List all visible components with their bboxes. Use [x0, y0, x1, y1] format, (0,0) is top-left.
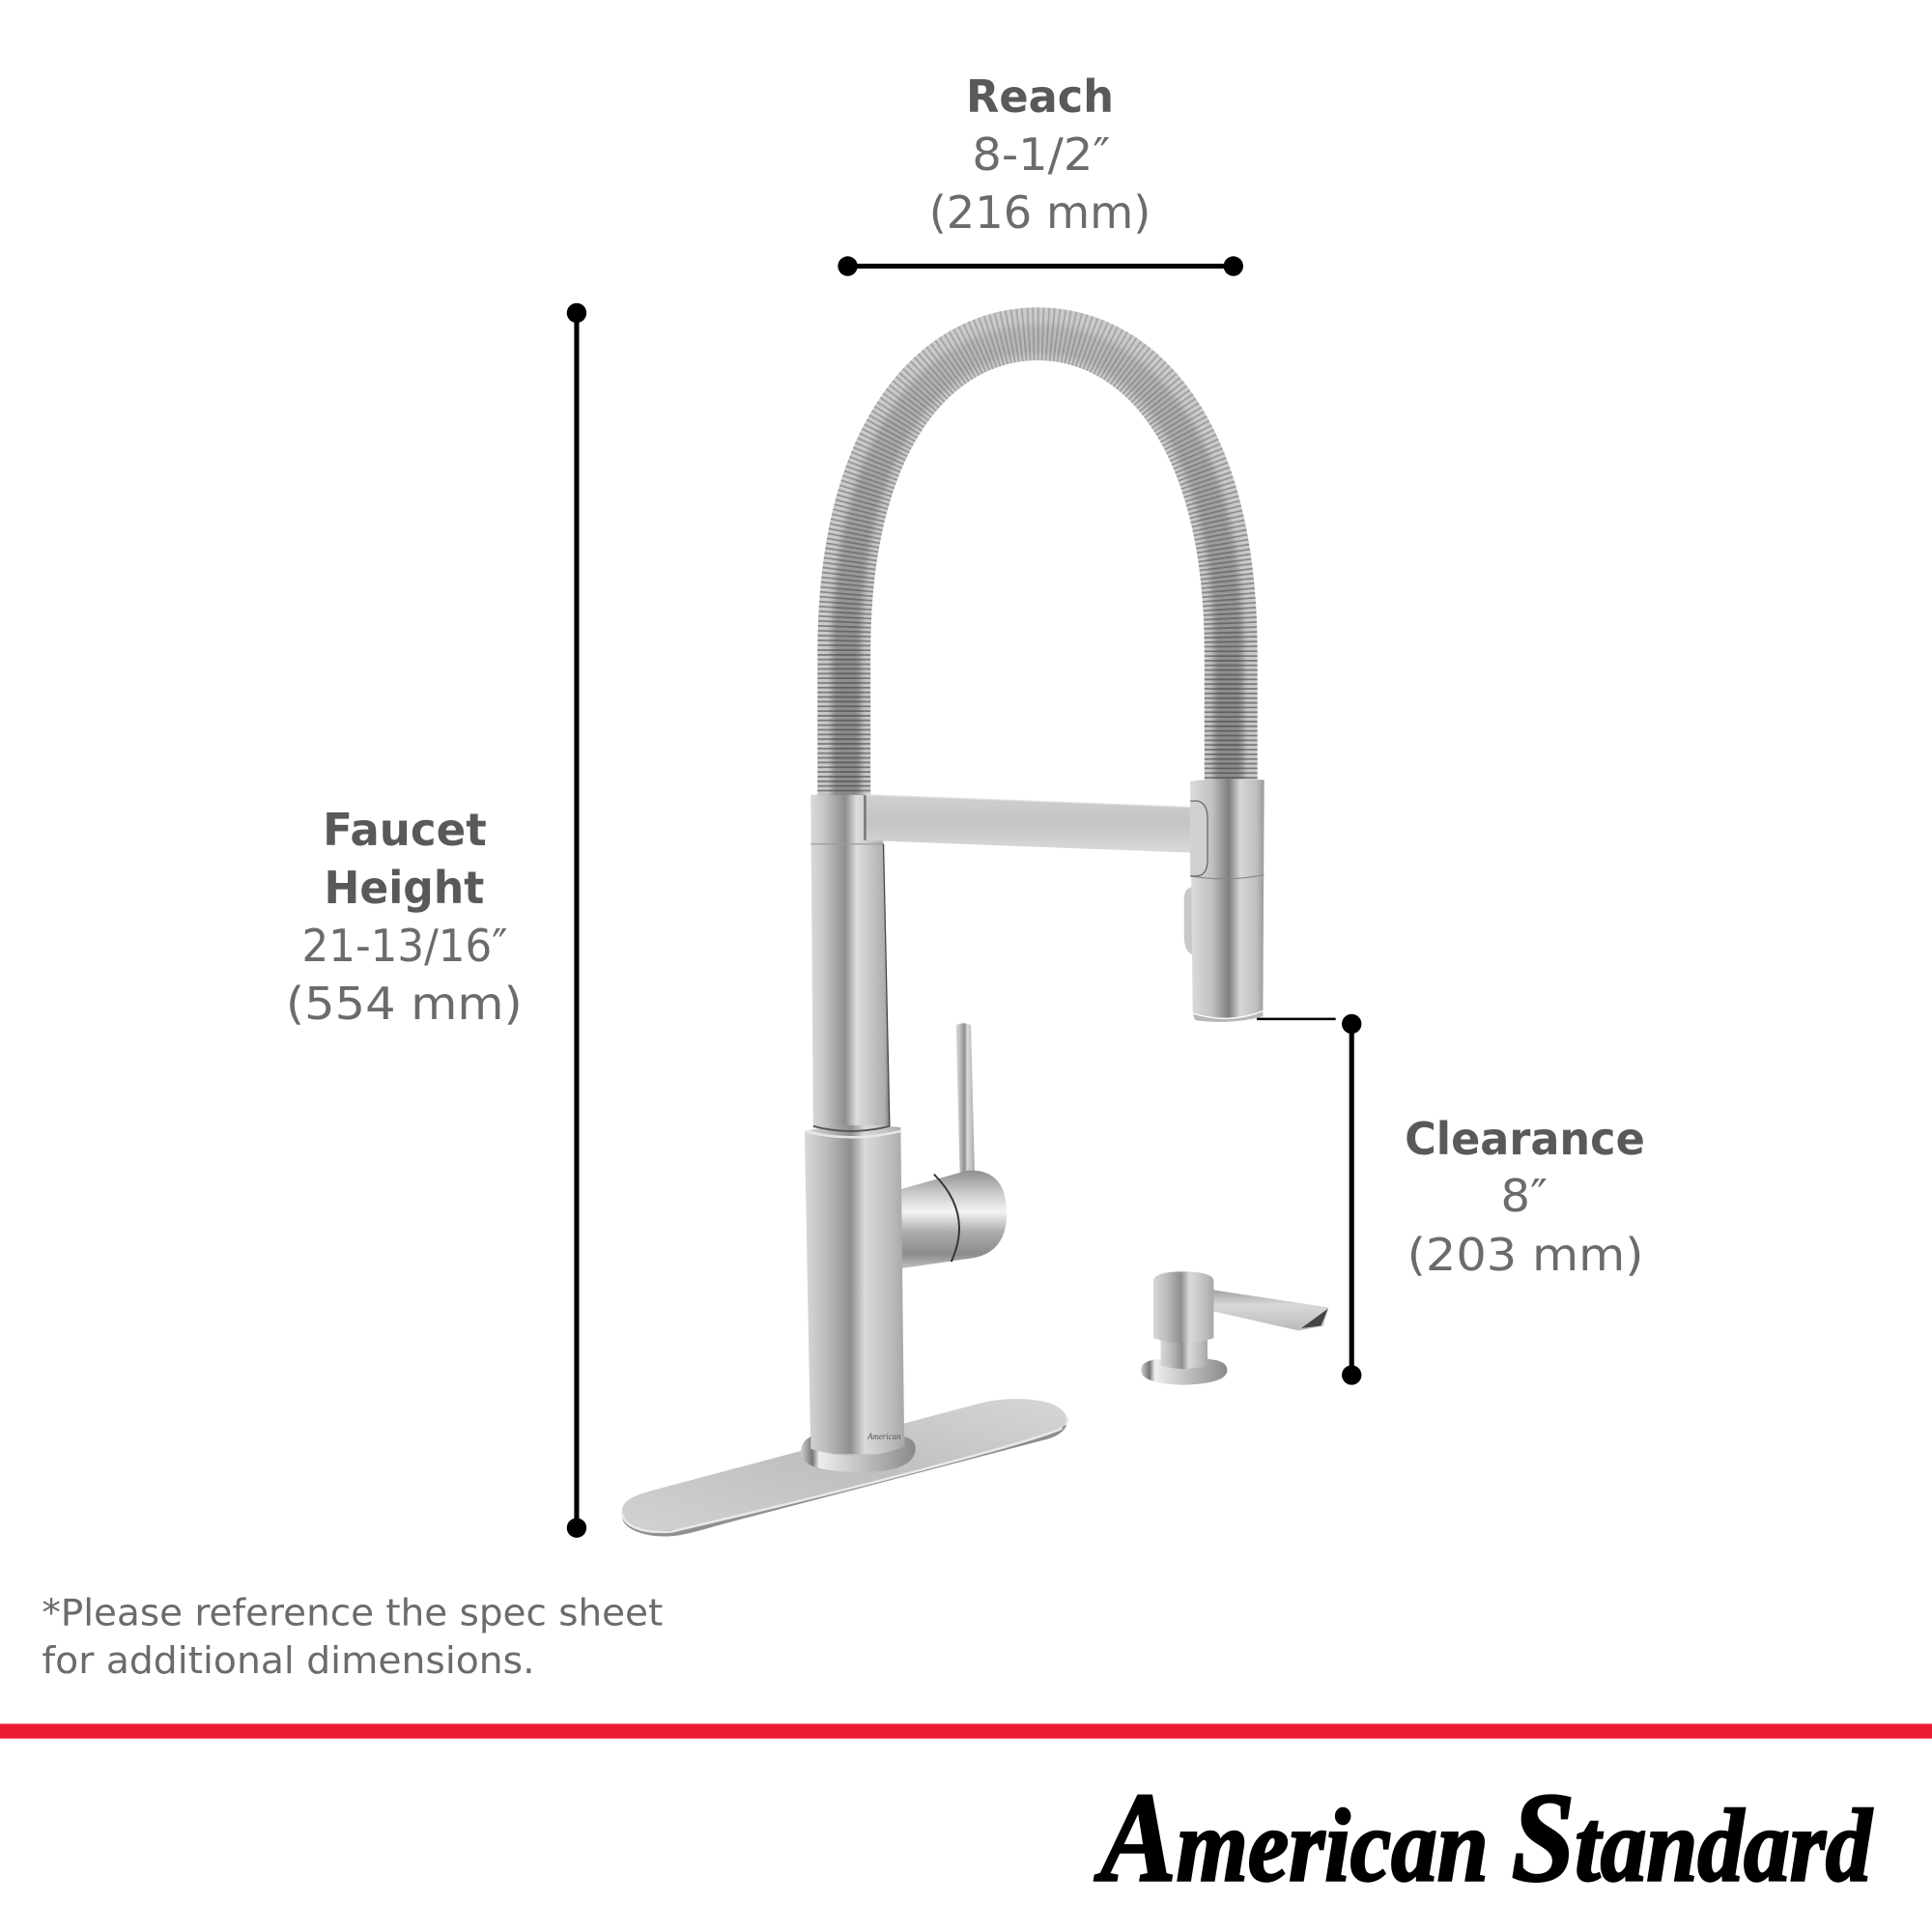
lower body [805, 1125, 904, 1454]
red divider band [0, 1723, 1932, 1739]
faucet height label: Faucet [323, 804, 487, 856]
deck plate [622, 1399, 1068, 1537]
base ring: American [867, 1432, 901, 1441]
clearance label [1405, 1113, 1645, 1281]
reach label: (216 mm) [929, 186, 1151, 239]
faucet height label: Height [324, 862, 484, 914]
faucet height label [286, 804, 523, 1030]
clearance label: (203 mm) [1407, 1229, 1644, 1281]
clearance label: 8″ [1501, 1170, 1548, 1222]
pull-down spray head [1184, 779, 1264, 1022]
handle hub [897, 1171, 1007, 1269]
reach dimension line [838, 256, 1243, 276]
soap dispenser [1141, 1271, 1328, 1385]
footnote: *Please reference the spec sheet [42, 1591, 663, 1634]
clearance label: Clearance [1405, 1113, 1645, 1165]
footnote [42, 1591, 663, 1683]
faucet height label: 21-13/16″ [301, 920, 508, 972]
faucet height dimension line [567, 303, 586, 1538]
American Standard logo: American Standard [1094, 1766, 1873, 1908]
horizontal support bar [865, 795, 1190, 853]
clearance dimension line [1257, 1014, 1361, 1385]
base ring [801, 1432, 916, 1472]
reach label: 8-1/2″ [972, 128, 1110, 181]
reach label [929, 71, 1151, 239]
faucet illustration [622, 334, 1328, 1537]
footnote: for additional dimensions. [42, 1639, 535, 1683]
faucet height label: (554 mm) [286, 978, 523, 1030]
reach label: Reach [966, 71, 1114, 123]
upper spout tube [810, 795, 890, 1127]
flexible coiled hose [844, 334, 1231, 801]
lever handle [956, 1023, 975, 1173]
